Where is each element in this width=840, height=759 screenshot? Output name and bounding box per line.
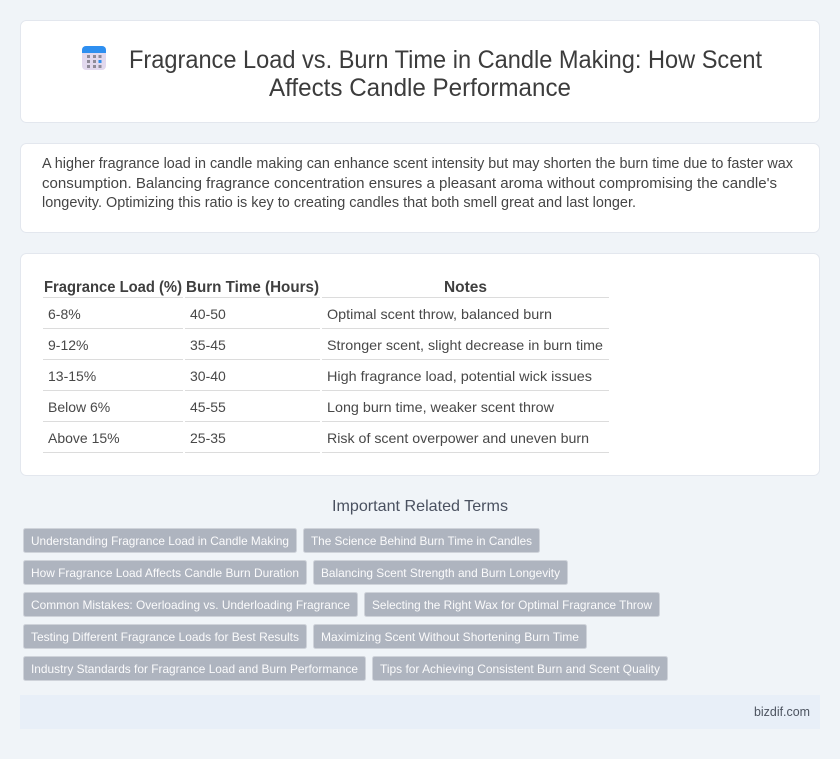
table row: 13-15% [43, 368, 609, 391]
table row: 6-8%: Optimal scent throw, balanced burn [327, 306, 552, 322]
tag [304, 528, 540, 552]
table row: 9-12%: Stronger scent, slight decrease in burn time [327, 337, 603, 353]
table row: 9-12%: 9-12% [48, 337, 88, 353]
footer [20, 695, 820, 729]
table row: above 15% [43, 430, 609, 453]
table row: 13-15%: High fragrance load, potential wick issues [327, 368, 592, 384]
table row: 6-8%: 40-50 [190, 306, 226, 322]
text: intro line 1: A higher fragrance load in candle making can enhance scent intensity but may shorten the burn time due to faster wax [42, 156, 794, 172]
footer: bizdif.com [754, 705, 810, 719]
tag [24, 656, 366, 680]
panel: related term tags [24, 528, 668, 680]
table row: below 6%: Below 6% [48, 399, 110, 415]
tag: How Fragrance Load Affects Candle Burn Duration [31, 566, 299, 580]
table row: above 15%: Risk of scent overpower and uneven burn [327, 430, 589, 446]
tag: Tips for Achieving Consistent Burn and Scent Quality [380, 662, 660, 676]
tag [24, 528, 296, 552]
tag [372, 656, 668, 680]
table header: Notes [444, 279, 487, 296]
table row: below 6%: Long burn time, weaker scent throw [327, 399, 555, 415]
text: intro line 2: consumption. Balancing fragrance concentration ensures a pleasant aroma without compromising the candle's [42, 176, 777, 192]
title: Fragrance Load vs. Burn Time in Candle Making: How Scent [129, 46, 762, 74]
panel: header [20, 20, 820, 122]
tag: The Science Behind Burn Time in Candles [311, 534, 532, 548]
heading: related terms: Important Related Terms [332, 498, 508, 515]
tag [24, 560, 306, 584]
table header: Fragrance Load (%) [44, 279, 182, 296]
table row: 9-12% [43, 337, 609, 360]
icon: calendar [82, 46, 106, 70]
tag: Understanding Fragrance Load in Candle Making [31, 534, 289, 548]
table row: below 6%: 45-55 [190, 399, 226, 415]
table row: 6-8%: 6-8% [48, 306, 81, 322]
text: intro line 3: longevity. Optimizing this ratio is key to creating candles that both smell great and last longer. [42, 195, 636, 211]
tag [314, 624, 586, 648]
tag: Testing Different Fragrance Loads for Best Results [31, 630, 299, 644]
tag: Industry Standards for Fragrance Load and Burn Performance [31, 662, 358, 676]
tag: Maximizing Scent Without Shortening Burn Time [321, 630, 579, 644]
table row: above 15%: Above 15% [48, 430, 120, 446]
table header: Burn Time (Hours) [186, 279, 319, 296]
tag: Selecting the Right Wax for Optimal Fragrance Throw [372, 598, 652, 612]
tag [314, 560, 568, 584]
tag [364, 592, 660, 616]
table row: below 6% [43, 399, 609, 422]
panel: introduction [20, 144, 820, 232]
tag [24, 592, 358, 616]
tag [24, 624, 306, 648]
title line 2: Affects Candle Performance [269, 74, 571, 102]
tag: Common Mistakes: Overloading vs. Underloading Fragrance [31, 598, 350, 612]
panel: data table [20, 254, 820, 476]
table row: 6-8% [43, 306, 609, 329]
table row: 9-12%: 35-45 [190, 337, 226, 353]
table row: 13-15%: 13-15% [48, 368, 96, 384]
table header [43, 279, 609, 298]
tag: Balancing Scent Strength and Burn Longevity [321, 566, 560, 580]
table row: 13-15%: 30-40 [190, 368, 226, 384]
table row: above 15%: 25-35 [190, 430, 226, 446]
